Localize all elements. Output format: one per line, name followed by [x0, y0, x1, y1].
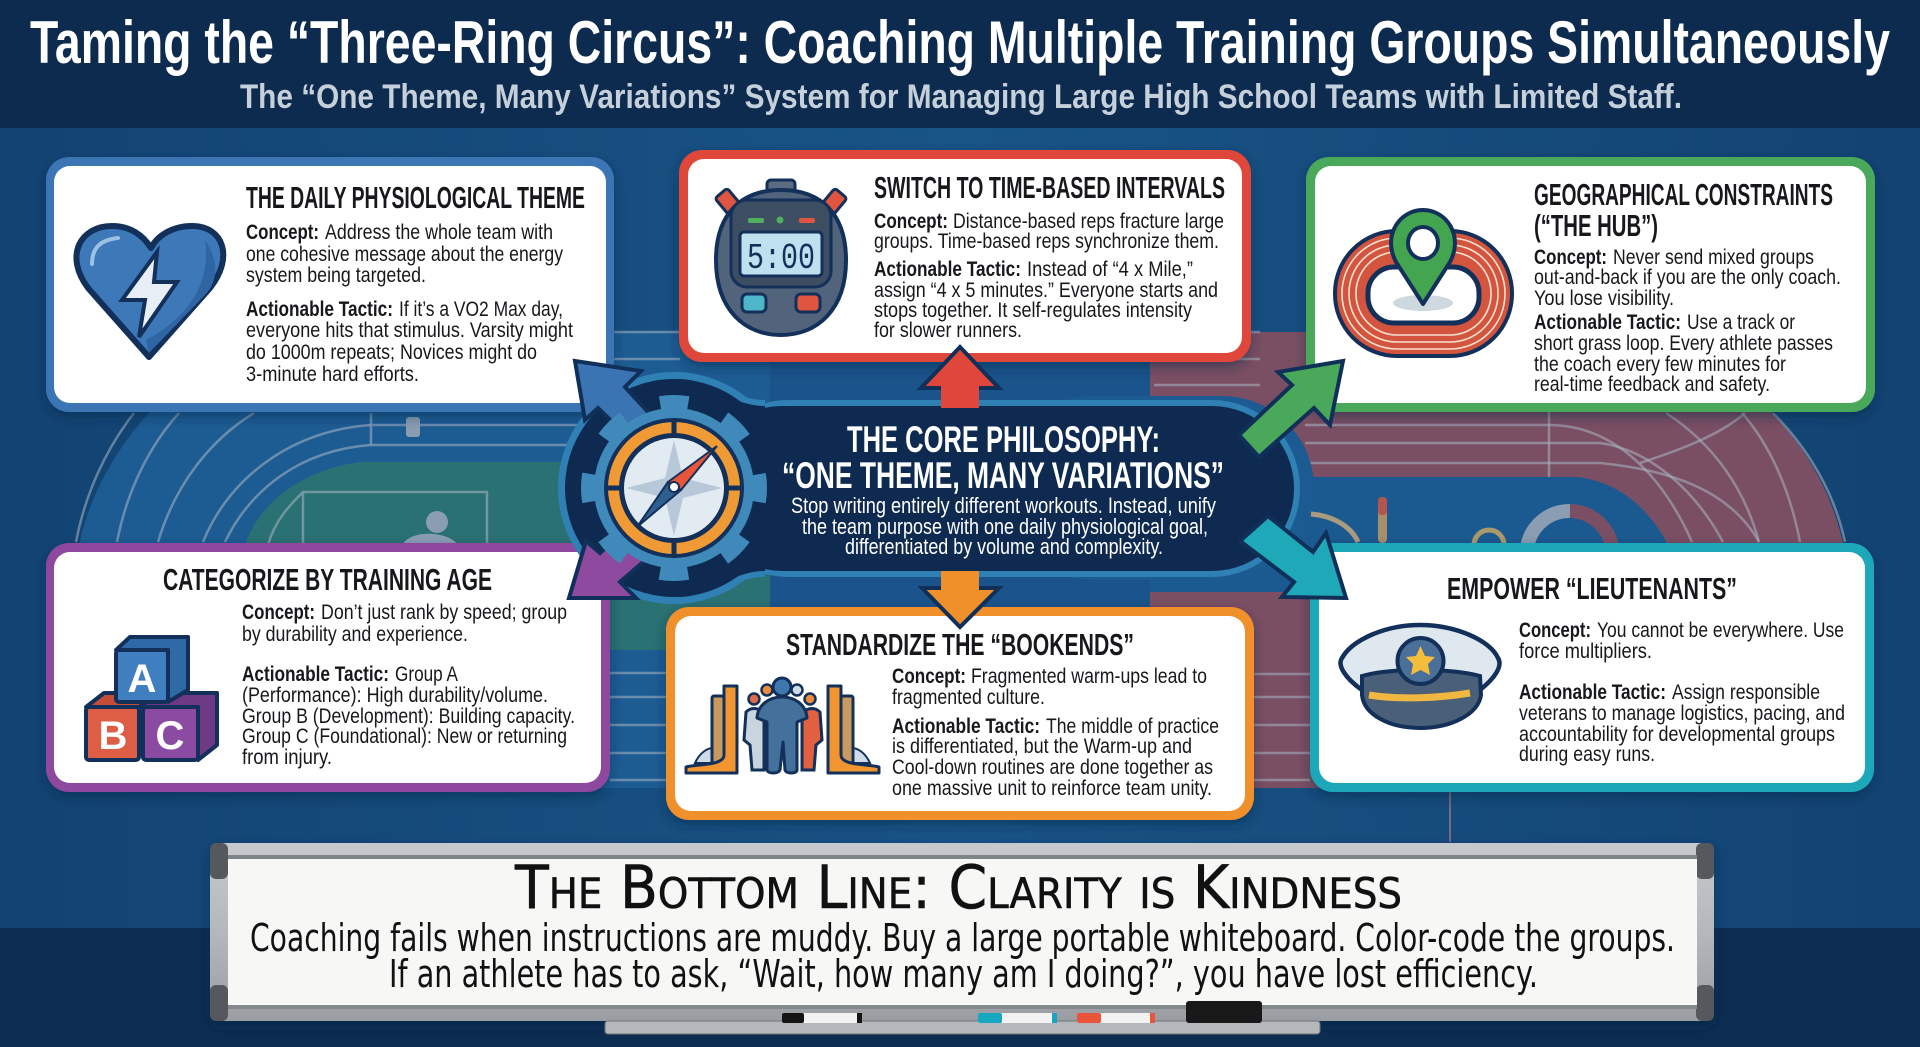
body text: Actionable Tactic: [246, 297, 393, 321]
body text: Cool-down routines are done together as [892, 755, 1213, 779]
background: right track [1150, 332, 1846, 788]
body text: Never send mixed groups [1613, 245, 1814, 269]
arrow: to categorize by training age [569, 532, 650, 598]
body text: Concept: [1519, 618, 1591, 642]
header band [0, 0, 1920, 128]
body text: the coach every few minutes for [1534, 352, 1786, 376]
body text: assign “4 x 5 minutes.” Everyone starts and [874, 278, 1218, 302]
icon: stopwatch [715, 180, 847, 335]
body text: Address the whole team with [325, 220, 553, 244]
body text: Don’t just rank by speed; group [321, 600, 567, 624]
icon: compass on gear [589, 403, 759, 573]
body text: do 1000m repeats; Novices might do [246, 340, 537, 364]
panel: standardize the bookends [666, 607, 1254, 820]
body text: from injury. [242, 745, 332, 769]
body text: short grass loop. Every athlete passes [1534, 331, 1833, 355]
heading: SWITCH TO TIME-BASED INTERVALS [874, 170, 1225, 205]
body text: veterans to manage logistics, pacing, and [1519, 701, 1845, 725]
background: left track [76, 332, 770, 788]
body text: Concept: [892, 664, 966, 688]
background: centre infield [770, 332, 1150, 632]
body text: for slower runners. [874, 318, 1022, 342]
subtitle: The “One Theme, Many Variations” System for Managing Large High School Teams with Limited Staff. [240, 78, 1682, 116]
heading: core philosophy: “ONE THEME, MANY VARIATIONS” [782, 455, 1224, 496]
whiteboard heading: The Bottom Line: Clarity is Kindness [514, 853, 1402, 923]
arrow: to empower lieutenants [1240, 516, 1346, 598]
icon: ABC blocks: A [128, 657, 156, 701]
body text [1534, 245, 1841, 396]
body text: Actionable Tactic: [892, 714, 1040, 738]
icon: track with location pin [1335, 210, 1512, 356]
body text: Concept: [246, 220, 319, 244]
text: core philosophy description: differentiated by volume and complexity. [845, 534, 1163, 559]
panel: switch to time-based intervals [679, 150, 1251, 362]
heading: EMPOWER “LIEUTENANTS” [1447, 571, 1737, 606]
panel: geographical constraints [1306, 157, 1875, 412]
text: core philosophy description: the team purpose with one daily physiological goal, [802, 514, 1208, 539]
body text: Group B (Development): Building capacity. [242, 704, 575, 728]
body text: Actionable Tactic: [1534, 310, 1681, 334]
body text: is differentiated, but the Warm-up and [892, 734, 1192, 758]
body text: system being targeted. [246, 263, 426, 287]
body text: real-time feedback and safety. [1534, 372, 1770, 396]
panel: the daily physiological theme [46, 157, 614, 412]
icon: team between bookends [686, 678, 879, 773]
body text: Group A [395, 662, 459, 686]
body text: If it’s a VO2 Max day, [399, 297, 563, 321]
body text: Actionable Tactic: [242, 662, 389, 686]
body text: force multipliers. [1519, 639, 1652, 663]
body text: You lose visibility. [1534, 286, 1674, 310]
body text [1519, 618, 1845, 766]
arrow: to geographical constraints [1239, 361, 1343, 457]
body text: (Performance): High durability/volume. [242, 683, 548, 707]
body text: Group C (Foundational): New or returning [242, 724, 567, 748]
heading [1534, 177, 1833, 243]
body text: Assign responsible [1672, 680, 1820, 704]
body text: fragmented culture. [892, 685, 1045, 709]
text: core philosophy description [791, 493, 1216, 559]
body text: You cannot be everywhere. Use [1597, 618, 1844, 642]
icon: ABC blocks: B [99, 714, 127, 758]
text: core philosophy description: Stop writing entirely different workouts. Instead, unify [791, 493, 1216, 518]
body text: one massive unit to reinforce team unity. [892, 776, 1212, 800]
body text: Concept: [874, 209, 948, 233]
central hub: core philosophy pill [558, 372, 1314, 604]
heading: THE DAILY PHYSIOLOGICAL THEME [246, 180, 585, 215]
icon: ABC blocks: C [156, 714, 184, 758]
heading: core philosophy: THE CORE PHILOSOPHY: [847, 419, 1160, 460]
icon: ABC blocks [86, 637, 217, 760]
body text [246, 220, 573, 386]
icon: stopwatch: 5:00 [747, 238, 815, 279]
body text: Concept: [242, 600, 315, 624]
body text: groups. Time-based reps synchronize them. [874, 229, 1219, 253]
body text: Instead of “4 x Mile,” [1027, 257, 1193, 281]
body text: by durability and experience. [242, 622, 468, 646]
body text: out-and-back if you are the only coach. [1534, 265, 1841, 289]
body text: The middle of practice [1046, 714, 1219, 738]
body text: Use a track or [1687, 310, 1795, 334]
body text: Concept: [1534, 245, 1607, 269]
whiteboard: bottom line [210, 843, 1714, 1034]
body text: one cohesive message about the energy [246, 242, 563, 266]
heading: core philosophy [782, 419, 1224, 496]
panel: empower lieutenants [1310, 543, 1874, 792]
body text: everyone hits that stimulus. Varsity might [246, 318, 573, 342]
markers and eraser [782, 1001, 1262, 1023]
panel: categorize by training age [46, 543, 610, 792]
body text [892, 664, 1219, 800]
arrow: to daily physiological theme [575, 361, 660, 445]
arrow: to time-based intervals [921, 347, 999, 408]
body text: stops together. It self-regulates intensity [874, 298, 1192, 322]
body text [242, 600, 575, 769]
body text: Actionable Tactic: [874, 257, 1021, 281]
body text: Distance-based reps fracture large [953, 209, 1224, 233]
arrow: to bookends [922, 571, 999, 627]
heading: (“THE HUB”) [1534, 208, 1658, 243]
icon: heart with lightning bolt [76, 226, 223, 357]
whiteboard text: If an athlete has to ask, “Wait, how many am I doing?”, you have lost efficiency. [389, 952, 1538, 996]
whiteboard text [250, 916, 1675, 996]
icon: officer cap [1341, 625, 1499, 728]
body text: Actionable Tactic: [1519, 680, 1666, 704]
body text: during easy runs. [1519, 742, 1655, 766]
body text: 3-minute hard efforts. [246, 362, 419, 386]
heading: STANDARDIZE THE “BOOKENDS” [786, 627, 1134, 662]
body text [874, 209, 1224, 342]
heading: CATEGORIZE BY TRAINING AGE [163, 562, 492, 597]
body text: accountability for developmental groups [1519, 722, 1835, 746]
body text: Fragmented warm-ups lead to [971, 664, 1207, 688]
